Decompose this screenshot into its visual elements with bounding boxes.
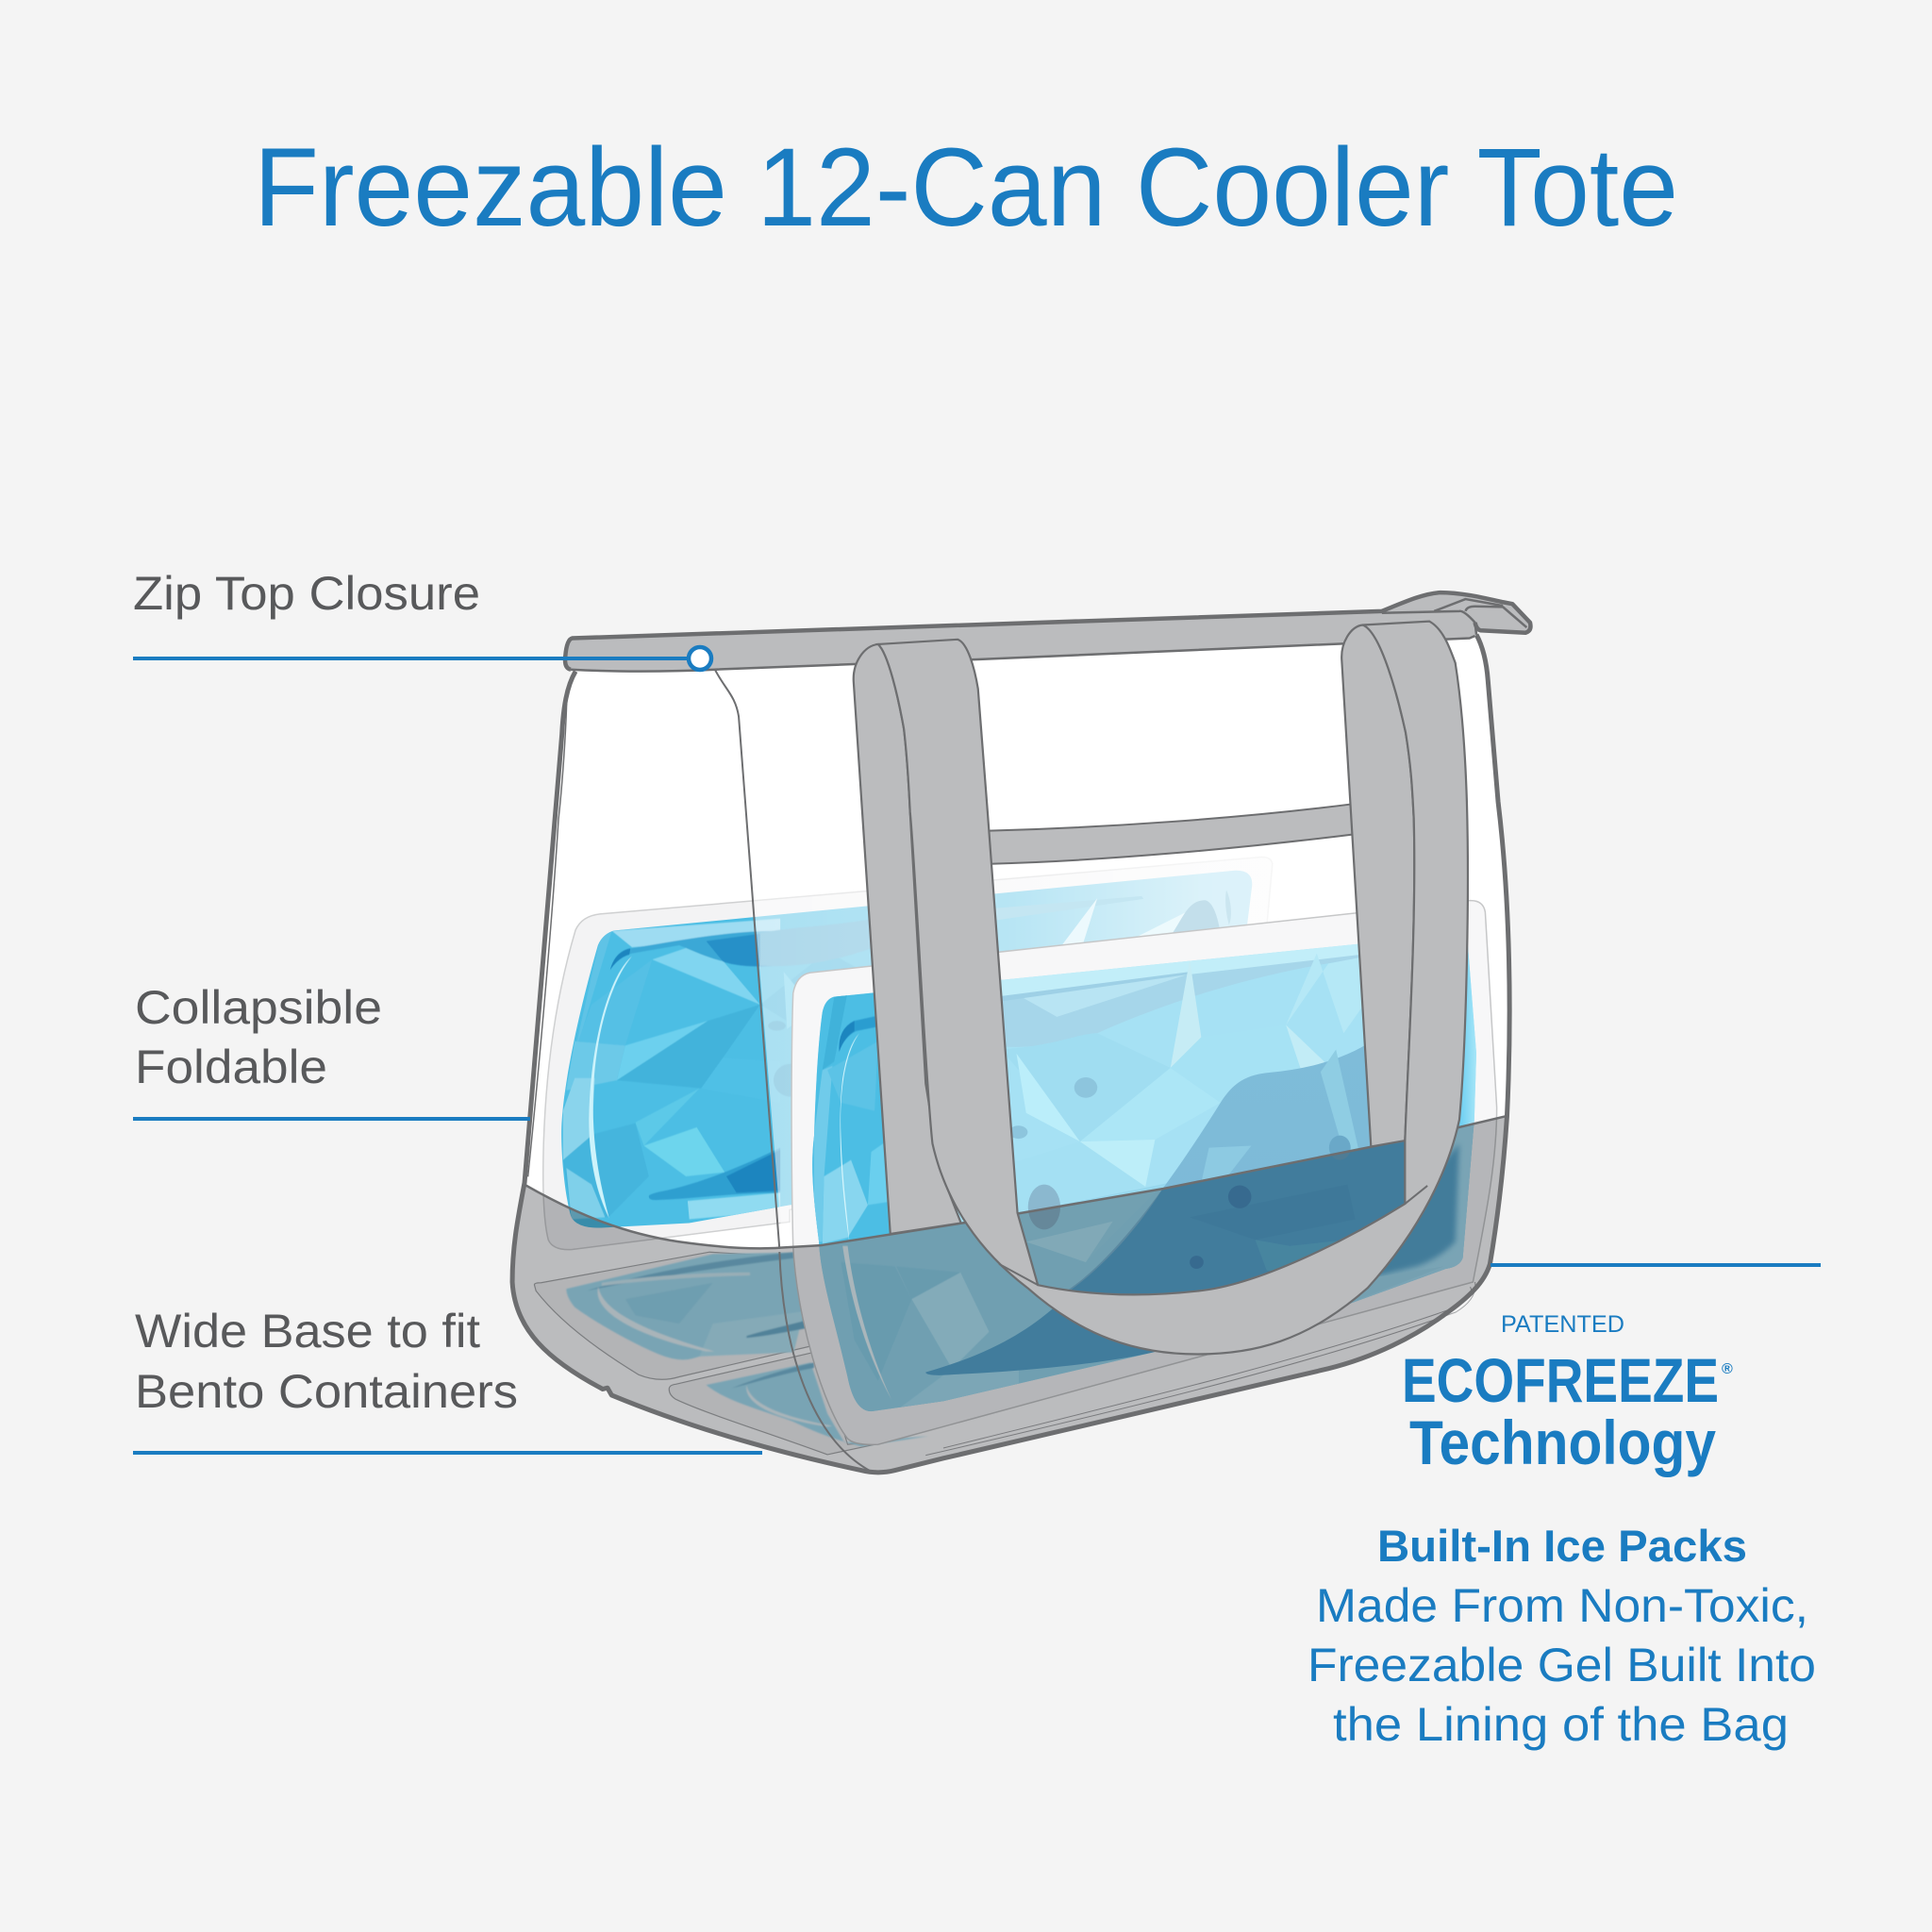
in-band dark mass — [1067, 1141, 1406, 1299]
description body: Made From Non-Toxic, — [1316, 1579, 1808, 1632]
front ice pack gel — [812, 943, 1476, 1411]
patented label: PATENTED — [1501, 1311, 1624, 1338]
floor pack right gel — [707, 1362, 928, 1446]
facets of middle gel — [1001, 1033, 1171, 1141]
leader line — [133, 1117, 530, 1121]
floor ice pack right — [669, 1352, 928, 1455]
callout: collapsible foldable — [133, 981, 530, 1119]
callout: wide base — [133, 1305, 762, 1453]
center strap strip — [989, 804, 1358, 864]
callout: ecofreeze technology — [1307, 1265, 1821, 1751]
dots — [1074, 1077, 1097, 1098]
label: Zip Top Closure — [133, 567, 480, 620]
callout: zip top closure — [133, 567, 711, 670]
lower left facets — [896, 1266, 960, 1299]
bottom gray band — [515, 1117, 1505, 1470]
band top edge — [525, 1116, 1507, 1248]
faded back pack details through window — [993, 890, 1231, 949]
back ice pack frame — [543, 858, 1273, 1250]
front U-shaped strap — [878, 622, 1468, 1355]
right gel zone — [1001, 944, 1476, 1303]
left inner side line — [528, 702, 567, 1176]
description body: Freezable Gel Built Into — [1307, 1639, 1816, 1691]
seam of front panel — [715, 670, 872, 1472]
label: Collapsible — [135, 981, 382, 1034]
front ice pack frame — [791, 901, 1497, 1444]
leader line — [133, 1451, 762, 1455]
mass — [1067, 1040, 1374, 1299]
back ice pack gel — [561, 870, 1253, 1228]
zipper top band — [565, 592, 1530, 672]
front panel translucent overlay — [754, 857, 1274, 1224]
floor ice pack left — [534, 1252, 810, 1379]
ecofreeze logo text: ECOFREEZE — [1402, 1345, 1719, 1415]
label: Wide Base to fit — [135, 1305, 480, 1357]
description body: the Lining of the Bag — [1333, 1698, 1789, 1751]
thin lines along bag base — [925, 1282, 1475, 1456]
technology text: Technology — [1409, 1407, 1716, 1477]
right strap back fold — [1341, 625, 1414, 1146]
zipper top outline — [565, 592, 1530, 670]
label: Bento Containers — [135, 1365, 518, 1418]
leader line — [1491, 1263, 1821, 1267]
marker dot — [689, 647, 711, 670]
zipper lower edge and tab folds — [571, 599, 1526, 672]
bag body — [512, 635, 1509, 1473]
floor pack left gel — [566, 1252, 810, 1359]
left saturated gel zone — [812, 992, 926, 1244]
dark swoosh under band left of strap — [925, 1309, 1155, 1375]
title: Freezable 12-Can Cooler Tote — [254, 125, 1678, 250]
label: Foldable — [135, 1041, 327, 1093]
registered mark: ® — [1722, 1361, 1733, 1377]
strap fold lines — [999, 1186, 1427, 1285]
lower-band gel tone — [819, 1121, 1474, 1411]
leader line — [133, 657, 691, 660]
description heading: Built-In Ice Packs — [1377, 1521, 1747, 1571]
left strap back fold — [854, 644, 961, 1234]
top band of middle gel — [1001, 944, 1358, 996]
illustration: cooler tote bag — [491, 592, 1530, 1505]
bag outline — [512, 635, 1509, 1473]
